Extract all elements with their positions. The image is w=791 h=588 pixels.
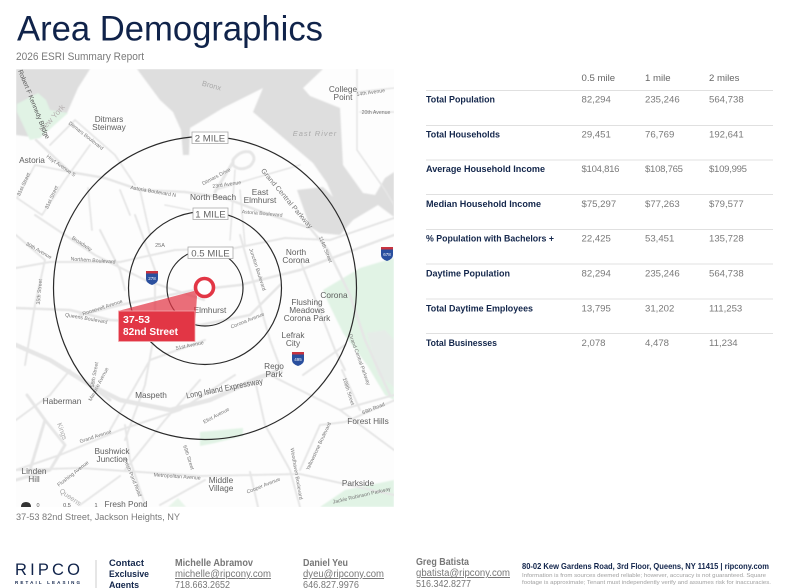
row: total businesses: 4,478	[645, 338, 669, 349]
footer divider	[96, 560, 97, 588]
row: daytime population: Daytime Population	[426, 268, 510, 280]
map labels: Corona Park	[284, 313, 331, 323]
0.5 mile ring	[167, 250, 243, 326]
row: total households	[426, 130, 744, 140]
map labels: Elmhurst	[244, 195, 277, 205]
row: average household income: $109,995	[709, 164, 747, 175]
map labels: Rego	[264, 361, 284, 371]
map labels: Hill	[28, 474, 40, 484]
map labels: Parkside	[342, 478, 375, 488]
map scale	[21, 502, 98, 507]
map labels: Jackie Robinson Parkway	[332, 486, 392, 506]
map labels: Corona Avenue	[230, 312, 265, 331]
row: daytime population: 564,738	[709, 268, 744, 280]
row: median household income: Median Household Income	[426, 199, 541, 210]
map labels: Grand Central Parkway	[347, 333, 371, 386]
map labels: 20th Avenue	[362, 110, 390, 116]
icon: site marker	[196, 278, 214, 296]
row: total population	[426, 94, 744, 106]
map labels: Robert F Kennedy Bridge	[16, 69, 51, 140]
map labels: 108th Street	[341, 377, 355, 407]
row: total households: 76,769	[645, 130, 674, 140]
map labels: Astoria Boulevard	[241, 209, 283, 219]
map labels: 51st Avenue	[175, 340, 204, 352]
map labels: Grand Central Parkway	[259, 168, 314, 231]
map labels: Bushwick	[94, 446, 130, 456]
row: population with bachelors: % Population with Bachelors +	[426, 234, 554, 244]
icon: interstate shields: 495	[294, 357, 302, 362]
map labels: Flushing Avenue	[56, 460, 90, 488]
map scale: 0.5	[63, 503, 71, 509]
contact: Greg Batista: gbatista@ripcony.com	[416, 568, 510, 579]
contact heading: Exclusive	[109, 569, 149, 580]
row: population with bachelors: 135,728	[709, 234, 744, 244]
row: total businesses: 11,234	[709, 338, 738, 349]
map labels: East	[252, 187, 269, 197]
row: population with bachelors: 53,451	[645, 234, 674, 244]
map labels: Kings	[55, 422, 68, 441]
logo: RIPCO: RIPCO	[15, 561, 80, 579]
map base	[16, 69, 394, 507]
map labels: 31st Street	[44, 184, 60, 210]
row: total daytime employees: 111,253	[709, 304, 742, 314]
map labels: Corona	[282, 255, 310, 265]
map labels: Junction Boulevard	[247, 248, 267, 292]
callout wedge	[118, 291, 197, 341]
row: average household income: Average Household Income	[426, 164, 545, 175]
map labels: Hoyt Avenue S	[45, 154, 77, 179]
row: total population: 235,246	[645, 94, 680, 106]
row: total households: 29,451	[582, 130, 611, 140]
subtitle: 2026 ESRI Summary Report	[16, 51, 144, 63]
road network	[16, 69, 395, 507]
row: daytime population: 82,294	[582, 268, 612, 280]
map labels: New York	[37, 102, 67, 134]
table header: 1 mile	[645, 73, 671, 84]
table header: 0.5 mile	[582, 73, 615, 84]
table header: 2 miles	[709, 73, 740, 84]
row: median household income: $79,577	[709, 199, 744, 210]
map labels	[16, 69, 392, 509]
map scale: 0	[36, 503, 40, 509]
title: Area Demographics	[17, 8, 323, 48]
map labels: Queens Boulevard	[64, 312, 108, 326]
contact heading: Contact	[109, 558, 145, 569]
contact: Michelle Abramov	[175, 558, 271, 588]
map labels: Haberman	[43, 396, 82, 406]
map labels: Cooper Avenue	[246, 477, 281, 496]
map labels: Northern Boulevard	[70, 256, 116, 266]
row: population with bachelors	[426, 234, 744, 244]
callout: site address: 82nd Street	[123, 327, 179, 338]
map labels: City	[286, 338, 301, 348]
row: total households: 192,641	[709, 130, 744, 140]
map labels: Bronx	[201, 79, 223, 93]
map labels: Park	[265, 369, 283, 379]
row: total population: Total Population	[426, 94, 495, 106]
panel: map	[16, 69, 395, 509]
contact: Daniel Yeu: dyeu@ripcony.com	[303, 569, 384, 580]
map labels: North	[286, 247, 307, 257]
row: total daytime employees: 13,795	[582, 304, 611, 314]
row: total businesses	[426, 338, 738, 349]
2 mile ring	[54, 136, 356, 440]
callout: site address	[118, 311, 195, 342]
radius rings	[54, 136, 356, 440]
contact: Michelle Abramov: michelle@ripcony.com	[175, 569, 271, 580]
map labels: Roosevelt Avenue	[82, 299, 124, 317]
map labels: Queens	[58, 488, 82, 508]
row: population with bachelors: 22,425	[582, 234, 611, 244]
callout: site address: 37-53	[123, 315, 150, 326]
map labels: Ditmars Drive	[201, 167, 232, 187]
map labels: Lefrak	[281, 330, 305, 340]
map labels: East River	[293, 129, 337, 138]
map labels: College	[329, 84, 357, 94]
disclaimer	[522, 573, 772, 586]
contact: Daniel Yeu: Daniel Yeu	[303, 558, 348, 569]
contact heading	[109, 558, 149, 588]
map labels: Village	[209, 483, 234, 493]
map labels: 31st Street	[16, 171, 32, 197]
icon: interstate shields: 278	[148, 276, 156, 281]
icon: interstate shields: 678	[383, 252, 391, 257]
table header	[582, 73, 740, 84]
row: median household income: $77,263	[645, 199, 680, 210]
map labels: Long Island Expressway	[185, 376, 264, 400]
contact: Michelle Abramov: Michelle Abramov	[175, 558, 254, 569]
row: total population: 82,294	[582, 94, 612, 106]
row: median household income	[426, 199, 744, 210]
row: average household income	[426, 164, 747, 175]
map labels: Maspeth	[135, 390, 167, 400]
map labels: Linden	[22, 466, 47, 476]
row: daytime population	[426, 268, 744, 280]
map labels: Grand Avenue	[79, 429, 112, 445]
map labels: Point	[334, 92, 353, 102]
row: average household income: $108,765	[645, 164, 683, 175]
map caption: 37-53 82nd Street, Jackson Heights, NY	[16, 512, 181, 523]
map labels: North Beach	[190, 192, 236, 202]
row: total households: Total Households	[426, 130, 500, 140]
map labels: Broadway	[70, 235, 93, 253]
demographics table	[426, 73, 773, 349]
logo: RIPCO: RETAIL LEASING	[15, 580, 80, 585]
map labels: Corona	[320, 290, 348, 300]
map labels: Middle	[209, 475, 234, 485]
icon: interstate shields	[146, 247, 393, 366]
map labels: Astoria	[19, 155, 45, 165]
row: total businesses: 2,078	[582, 338, 606, 349]
contact: Greg Batista	[416, 557, 510, 588]
map labels: Eliot Avenue	[202, 407, 231, 426]
contact: Greg Batista: Greg Batista	[416, 557, 469, 568]
ring label: 2 mile: 2 MILE	[195, 134, 225, 144]
map labels: 30th Avenue	[25, 241, 53, 261]
row: total daytime employees: 31,202	[645, 304, 674, 314]
1 mile ring	[128, 212, 282, 364]
map labels: Yellowstone Boulevard	[305, 422, 333, 472]
map labels: Forest Hills	[347, 416, 389, 426]
disclaimer: Information is from sources deemed reliable; however, accuracy is not guaranteed. Square	[522, 573, 766, 579]
map labels: 14th Avenue	[356, 88, 386, 98]
map labels: Ditmars Boulevard	[67, 121, 104, 152]
disclaimer: footage is approximate; Tenant must independently verify and assumes risk for inaccuracies.	[522, 580, 772, 586]
map labels: Astoria Boulevard N	[130, 185, 177, 199]
map labels: Woodhaven Boulevard	[288, 448, 304, 500]
map labels: 35th Street	[36, 278, 44, 305]
contact: Daniel Yeu	[303, 558, 384, 588]
map labels: 114th Street	[317, 236, 333, 264]
ring label: 0.5 mile: 0.5 MILE	[191, 248, 230, 260]
map labels: Fresh Pond Road	[122, 458, 142, 498]
map labels: Ditmars	[95, 114, 123, 124]
map labels: 69th Street	[181, 445, 195, 471]
map labels: Maurice Avenue	[88, 367, 111, 402]
row: daytime population: 235,246	[645, 268, 680, 280]
map labels: Metropolitan Avenue	[153, 472, 201, 482]
map labels: Steinway	[92, 122, 127, 132]
map labels: Elmhurst	[194, 305, 227, 315]
map scale: 1	[94, 503, 98, 509]
row: average household income: $104,816	[582, 164, 620, 175]
map labels: 23rd Avenue	[212, 180, 242, 190]
row: total businesses: Total Businesses	[426, 338, 497, 349]
row: total population: 564,738	[709, 94, 744, 106]
map labels: Fresh Pond	[105, 499, 148, 509]
row: median household income: $75,297	[582, 199, 616, 210]
map labels: Junction	[97, 454, 128, 464]
map labels: Flushing	[291, 297, 323, 307]
map labels: 58th Street	[90, 361, 100, 388]
row: total daytime employees: Total Daytime Employees	[426, 304, 533, 314]
row: total daytime employees	[426, 304, 742, 314]
water and parks	[16, 69, 394, 507]
map labels: Meadows	[289, 305, 325, 315]
ring label: 1 mile: 1 MILE	[195, 210, 226, 220]
map labels: 25A	[155, 243, 165, 249]
map labels: 69th Road	[361, 402, 386, 416]
